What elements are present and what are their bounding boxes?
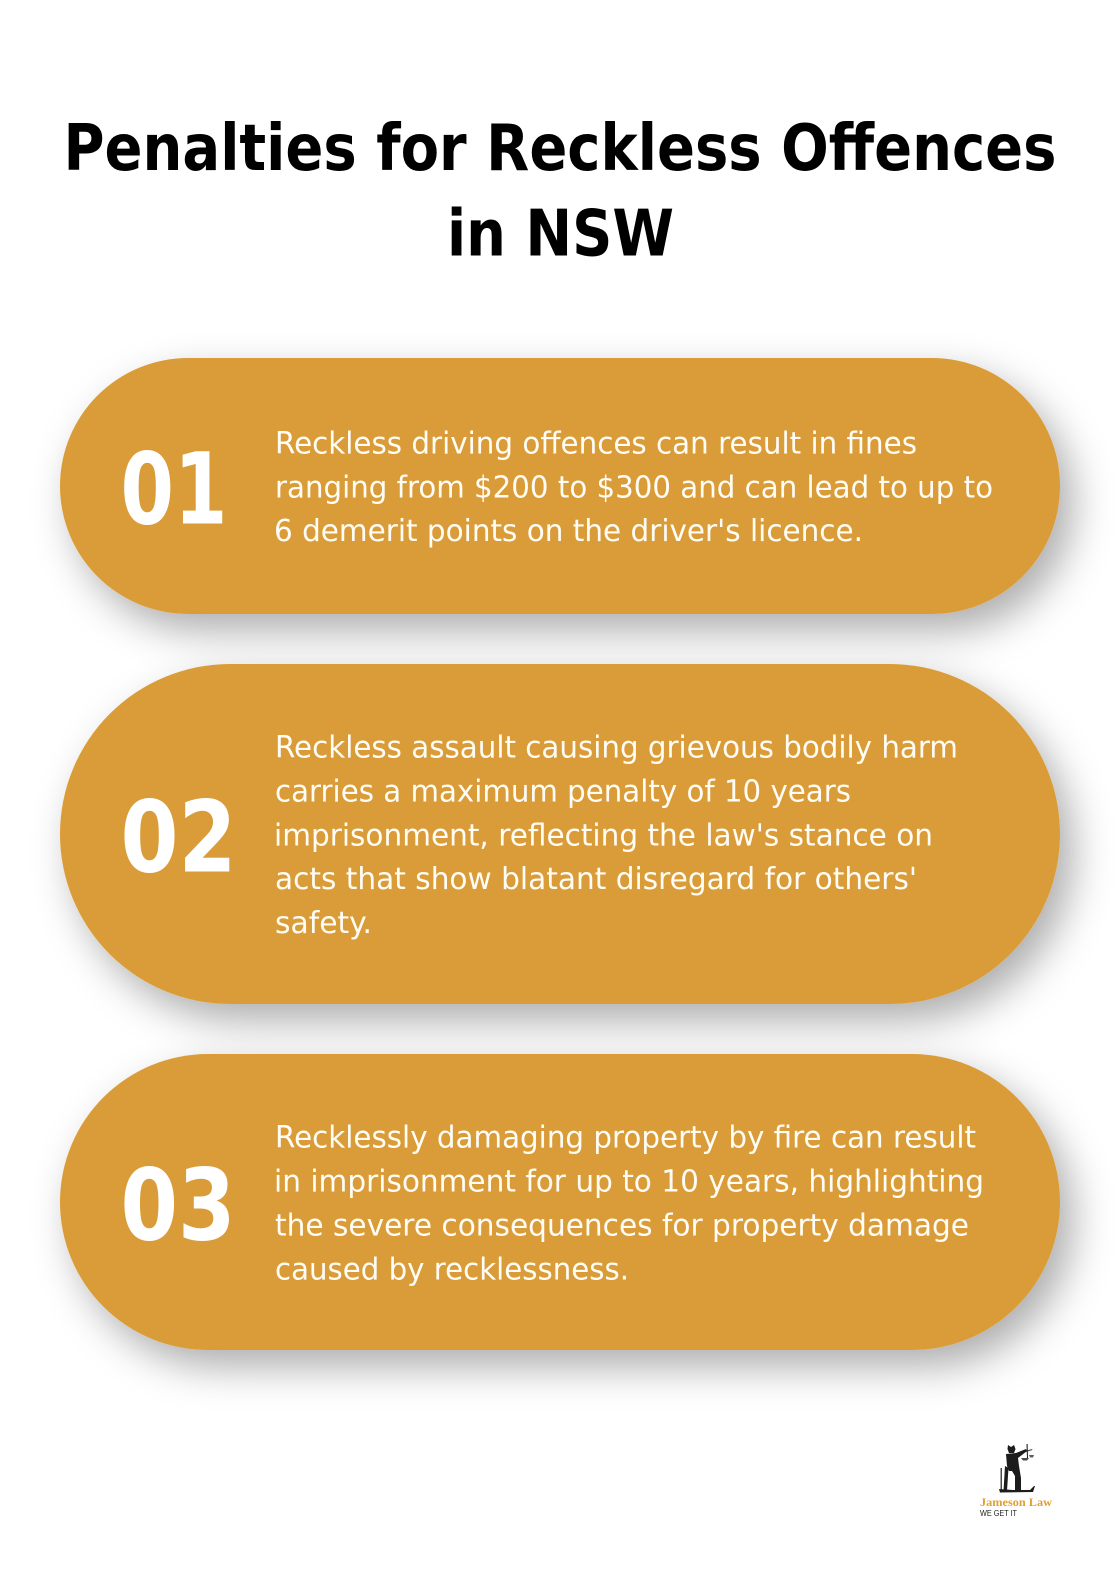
text block 3: Recklessly damaging property by fire can result	[275, 1120, 976, 1156]
text block 2: carries a maximum penalty of 10 years	[275, 774, 851, 810]
text block 1: Reckless driving offences can result in fines	[275, 427, 917, 462]
text block 2	[274, 730, 958, 941]
text block 3: caused by recklessness.	[275, 1252, 629, 1287]
title	[64, 112, 1056, 272]
text block 3: the severe consequences for property damage	[275, 1208, 969, 1243]
text block 3	[274, 1120, 984, 1287]
text block 3: in imprisonment for up to 10 years, highlighting	[274, 1164, 984, 1200]
text block 2: safety.	[275, 906, 372, 941]
panel: reckless property damage	[60, 1054, 1060, 1350]
panel: reckless assault	[60, 664, 1060, 1004]
text block 2: acts that show blatant disregard for others'	[275, 862, 917, 897]
number 01: 01	[120, 432, 228, 548]
tagline: WE GET IT	[980, 1509, 1017, 1518]
title: in NSW	[447, 198, 674, 272]
number 03: 03	[120, 1148, 236, 1264]
text block 1: ranging from $200 to $300 and can lead to up to	[275, 470, 993, 505]
pill background 2	[60, 664, 1060, 1004]
text block 2: Reckless assault causing grievous bodily harm	[275, 730, 958, 766]
text block 1: 6 demerit points on the driver's licence.	[274, 514, 863, 549]
brand name: Jameson Law	[980, 1497, 1053, 1509]
pill background 3	[60, 1054, 1060, 1350]
text block 2: imprisonment, reflecting the law's stance on	[274, 818, 933, 853]
text block 1	[274, 427, 993, 549]
number 02: 02	[120, 780, 236, 896]
pill background 1	[60, 358, 1060, 614]
icon: lady justice	[999, 1444, 1035, 1492]
logo: Jameson Law	[980, 1444, 1053, 1518]
panel: reckless driving	[60, 358, 1060, 614]
